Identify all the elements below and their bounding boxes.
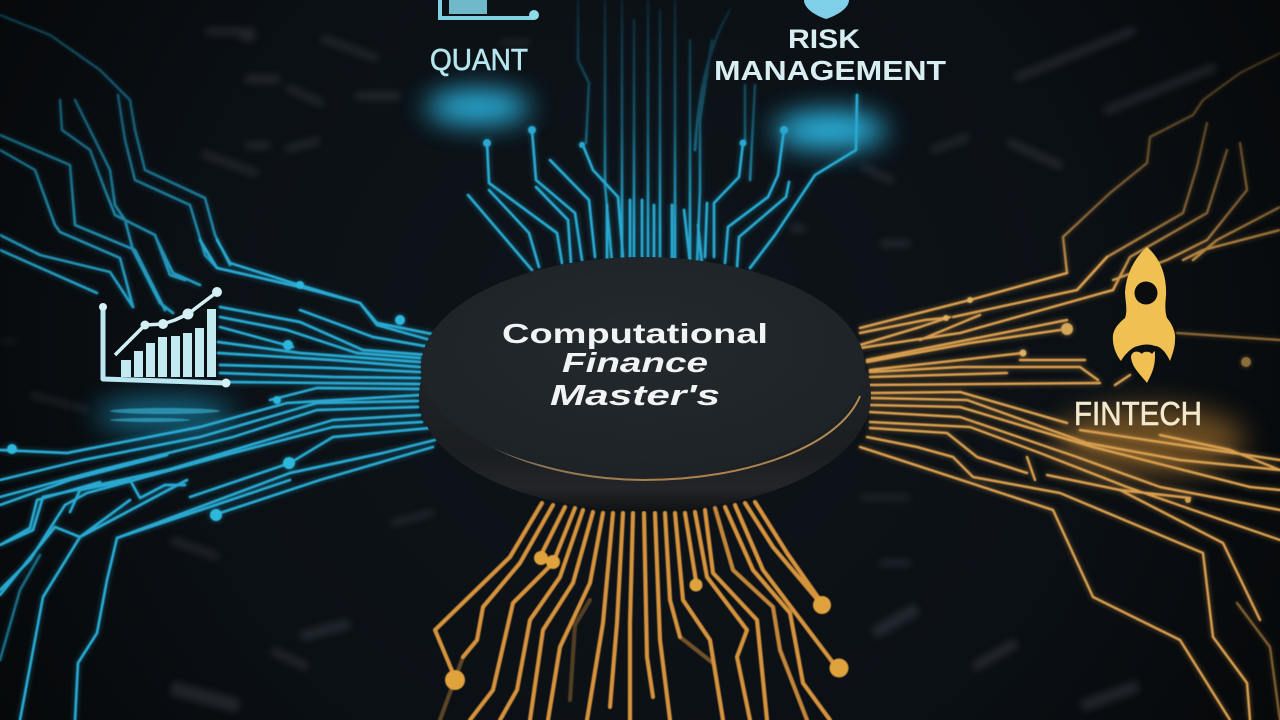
label: risk management: RISK — [788, 24, 861, 54]
icon: growth chart — [99, 287, 230, 388]
label: risk management: MANAGEMENT — [714, 55, 946, 86]
disc title: Computational — [502, 318, 768, 349]
icon: rocket — [1113, 247, 1175, 383]
glow: fintech — [1055, 406, 1245, 474]
circuit traces: top blue fan — [468, 0, 857, 270]
disc title — [502, 318, 768, 412]
icon: quant chart fragment — [440, 0, 539, 20]
glow: chart reflection — [95, 397, 235, 433]
disc top — [421, 257, 865, 477]
central disc — [419, 257, 871, 511]
label: fintech: FINTECH — [1074, 395, 1202, 432]
circuit traces: left blue fan — [0, 15, 437, 720]
circuit traces: right orange fan — [860, 53, 1280, 720]
glow: quant — [426, 90, 530, 124]
glow: risk management — [774, 111, 886, 149]
disc title: Master's — [550, 380, 720, 412]
icon: shield fragment — [804, 0, 849, 19]
disc rim — [428, 378, 860, 480]
disc title: Finance — [562, 347, 708, 378]
label: quant: QUANT — [430, 42, 528, 77]
circuit traces: bottom orange fan — [435, 502, 848, 720]
label: risk management — [714, 24, 946, 86]
disc base — [419, 281, 871, 511]
